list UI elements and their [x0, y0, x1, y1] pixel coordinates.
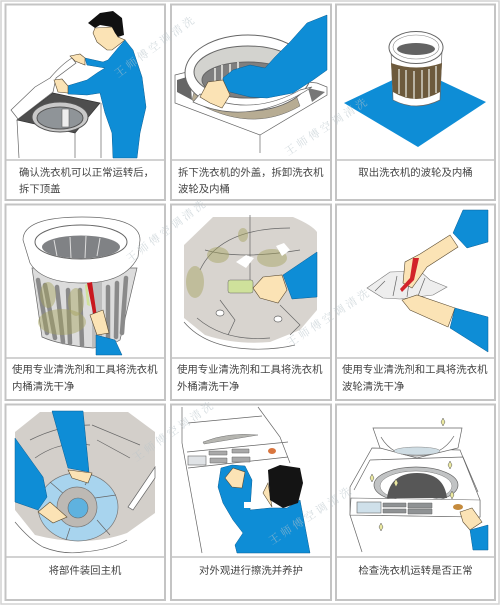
illustration: fitting impeller into tub [15, 411, 155, 553]
panel: step 6 clean impeller [336, 204, 495, 400]
caption: step 3: 取出洗衣机的波轮及内桶 [358, 166, 473, 179]
panel: step 9 check operation [336, 404, 495, 600]
caption: step 8: 对外观进行擦洗并养护 [199, 564, 303, 577]
watermarks: 王师傅空调清洗 [130, 397, 218, 464]
illustration: clean washer with finger on button [350, 418, 488, 552]
panel: step 3 take out tub [336, 4, 495, 200]
panel: step 2 remove outer cover [171, 4, 331, 200]
watermarks: 王师傅空调清洗 [112, 11, 199, 80]
panel: step 1 remove top cover [5, 4, 165, 200]
illustration: washer exterior and person wiping [182, 407, 310, 553]
caption: step 2: 波轮及内桶 [178, 182, 230, 196]
caption: step 1: 拆下顶盖 [19, 182, 61, 196]
caption: step 1: 确认洗衣机可以正常运转后， [19, 166, 154, 179]
caption: step 4: 内桶清洗干净 [12, 380, 74, 393]
icon: sparkles [370, 418, 454, 531]
illustration: washer ring and arm [175, 15, 327, 153]
caption: step 5: 使用专业清洗剂和工具将洗衣机 [177, 363, 323, 376]
illustration: tub on blue mat [344, 32, 486, 147]
watermarks: 王师傅空调清洗 [282, 93, 372, 159]
illustration: washer with lifted lid [11, 58, 101, 158]
illustration: inner tub with brush [23, 217, 140, 355]
panel: step 7 reassemble [5, 404, 165, 600]
caption: step 9: 检查洗衣机运转是否正常 [358, 564, 473, 577]
watermarks: 王师傅空调清洗 [123, 195, 210, 265]
illustration: hands, brush and impeller [367, 210, 488, 352]
illustration: dirty outer tub with hand and sponge [184, 215, 317, 349]
caption: step 7: 将部件装回主机 [49, 564, 122, 577]
panel: step 5 clean outer tub [171, 204, 331, 400]
caption: step 6: 使用专业清洗剂和工具将洗衣机 [342, 363, 488, 376]
caption: step 4: 使用专业清洗剂和工具将洗衣机 [12, 363, 158, 376]
watermarks: 王师傅空调清洗 [266, 482, 356, 548]
caption: step 2: 拆下洗衣机的外盖，拆卸洗衣机 [178, 166, 324, 179]
panel: step 4 clean inner tub [5, 204, 165, 400]
watermarks [112, 11, 374, 548]
watermarks: 王师傅空调清洗 [284, 284, 374, 350]
panel: step 8 wipe exterior [171, 404, 331, 600]
caption: step 6: 波轮清洗干净 [342, 380, 404, 393]
illustration: technician [54, 11, 146, 158]
caption: step 5: 外桶清洗干净 [177, 380, 239, 393]
